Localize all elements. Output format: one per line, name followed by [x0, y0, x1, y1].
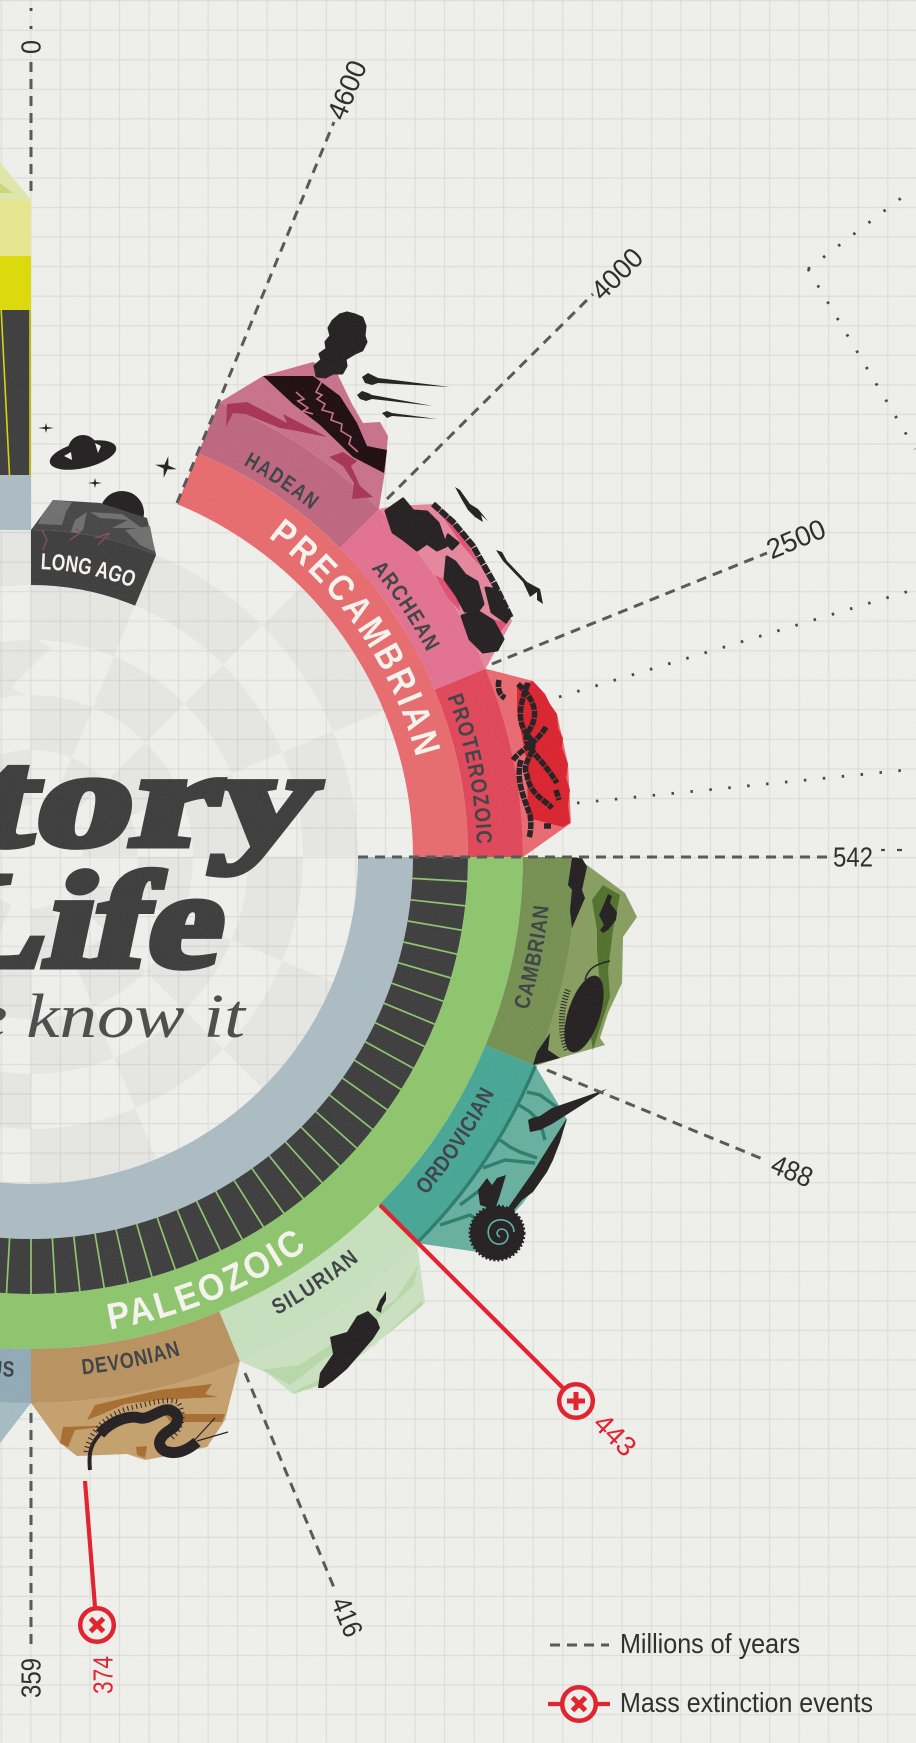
legend: mass extinction events — [548, 1687, 873, 1721]
extinction event 374: 374 — [88, 1656, 118, 1694]
year labels: 2500 — [762, 513, 830, 565]
year labels: 0 — [16, 40, 46, 54]
icon: small trilobite — [599, 894, 617, 933]
icon: comets — [357, 373, 450, 419]
icon: dark planet dome — [100, 491, 144, 535]
fossil: jagged outer crust — [433, 504, 511, 618]
panel: Long Ago — [31, 491, 156, 606]
panel: Hadean — [199, 312, 450, 548]
extinction event 443: 443 — [587, 1407, 643, 1463]
extinction event 443 — [380, 1205, 643, 1463]
panel: Ordovician — [379, 1045, 607, 1262]
fossil: brown strata — [60, 1384, 225, 1458]
panel: Cambrian — [486, 857, 637, 1066]
label: Archean: ARCHEAN — [372, 562, 440, 651]
year labels: 416 — [325, 1593, 369, 1641]
legend — [548, 1628, 873, 1721]
label: Cambrian: CAMBRIAN — [514, 906, 548, 1008]
icon: eurypterid — [318, 1311, 380, 1388]
label: Hadean: HADEAN — [244, 452, 320, 510]
extinction event 374 — [80, 1481, 118, 1694]
panel: Carboniferous partial — [0, 1348, 31, 1443]
fossil: black rock strips — [533, 858, 587, 1065]
top column: Cenozoic bands cropped at page edge — [0, 162, 31, 530]
panel: Devonian — [31, 1312, 240, 1470]
fossil: pale green strata — [262, 1265, 423, 1394]
label: Long Ago: LONG AGO — [42, 553, 136, 586]
icon: small fish — [376, 1291, 386, 1313]
fossil: crimson lava streaks — [226, 402, 373, 499]
fossil: black rock masses — [386, 499, 510, 652]
fossil: dark green seam — [590, 885, 620, 1050]
year labels: 4000 — [585, 242, 649, 306]
fossil: red algae mat — [517, 681, 570, 827]
ring ticks — [6, 878, 467, 1294]
dark tick ring — [0, 857, 468, 1294]
legend: mass extinction events: Mass extinction events — [620, 1687, 873, 1718]
icon: archean creature two — [496, 550, 543, 604]
label: Devonian: DEVONIAN — [82, 1340, 180, 1374]
heading: Paleozoic: PALEOZOIC — [107, 1231, 303, 1330]
icon: volcano smoke — [315, 313, 366, 377]
year labels: 488 — [767, 1149, 817, 1193]
icon: centipede fossil — [86, 1401, 228, 1470]
fossil: dark volcanic slope — [263, 376, 387, 473]
panel: Precambrian eon band — [177, 454, 468, 857]
icon: orthocone shell — [528, 1089, 607, 1132]
fossil: black stromatolite strands — [498, 680, 559, 838]
central checker pattern — [0, 558, 384, 1156]
legend: millions of years: Millions of years — [620, 1628, 800, 1659]
label: Ordovician: ORDOVICIAN — [417, 1087, 494, 1192]
panel: Archean — [340, 487, 543, 690]
fossil: lightning veins — [296, 381, 358, 452]
icon: archean creature one — [455, 487, 488, 522]
panel: Silurian — [220, 1205, 425, 1394]
icon: large trilobite — [556, 961, 612, 1057]
icon: rock edge — [505, 1118, 567, 1215]
icon: nautiloid — [470, 1175, 524, 1260]
heading: Precambrian: PRECAMBRIAN — [270, 518, 440, 756]
year labels: 359 — [16, 1658, 46, 1698]
year labels: 542 — [833, 842, 873, 872]
panel: Proterozoic — [434, 668, 571, 857]
label: Silurian: SILURIAN — [272, 1249, 358, 1314]
fossil: dark cracks — [417, 1066, 558, 1243]
fossil: pink veins — [435, 505, 508, 645]
year labels: 4600 — [321, 56, 373, 124]
icon: stars — [38, 423, 179, 488]
panel: Paleozoic era band — [0, 857, 523, 1349]
grey inner ring — [0, 857, 413, 1239]
icon: ringed planet — [47, 435, 119, 475]
label: Proterozoic: PROTEROZOIC — [448, 693, 492, 844]
title — [0, 725, 335, 1051]
